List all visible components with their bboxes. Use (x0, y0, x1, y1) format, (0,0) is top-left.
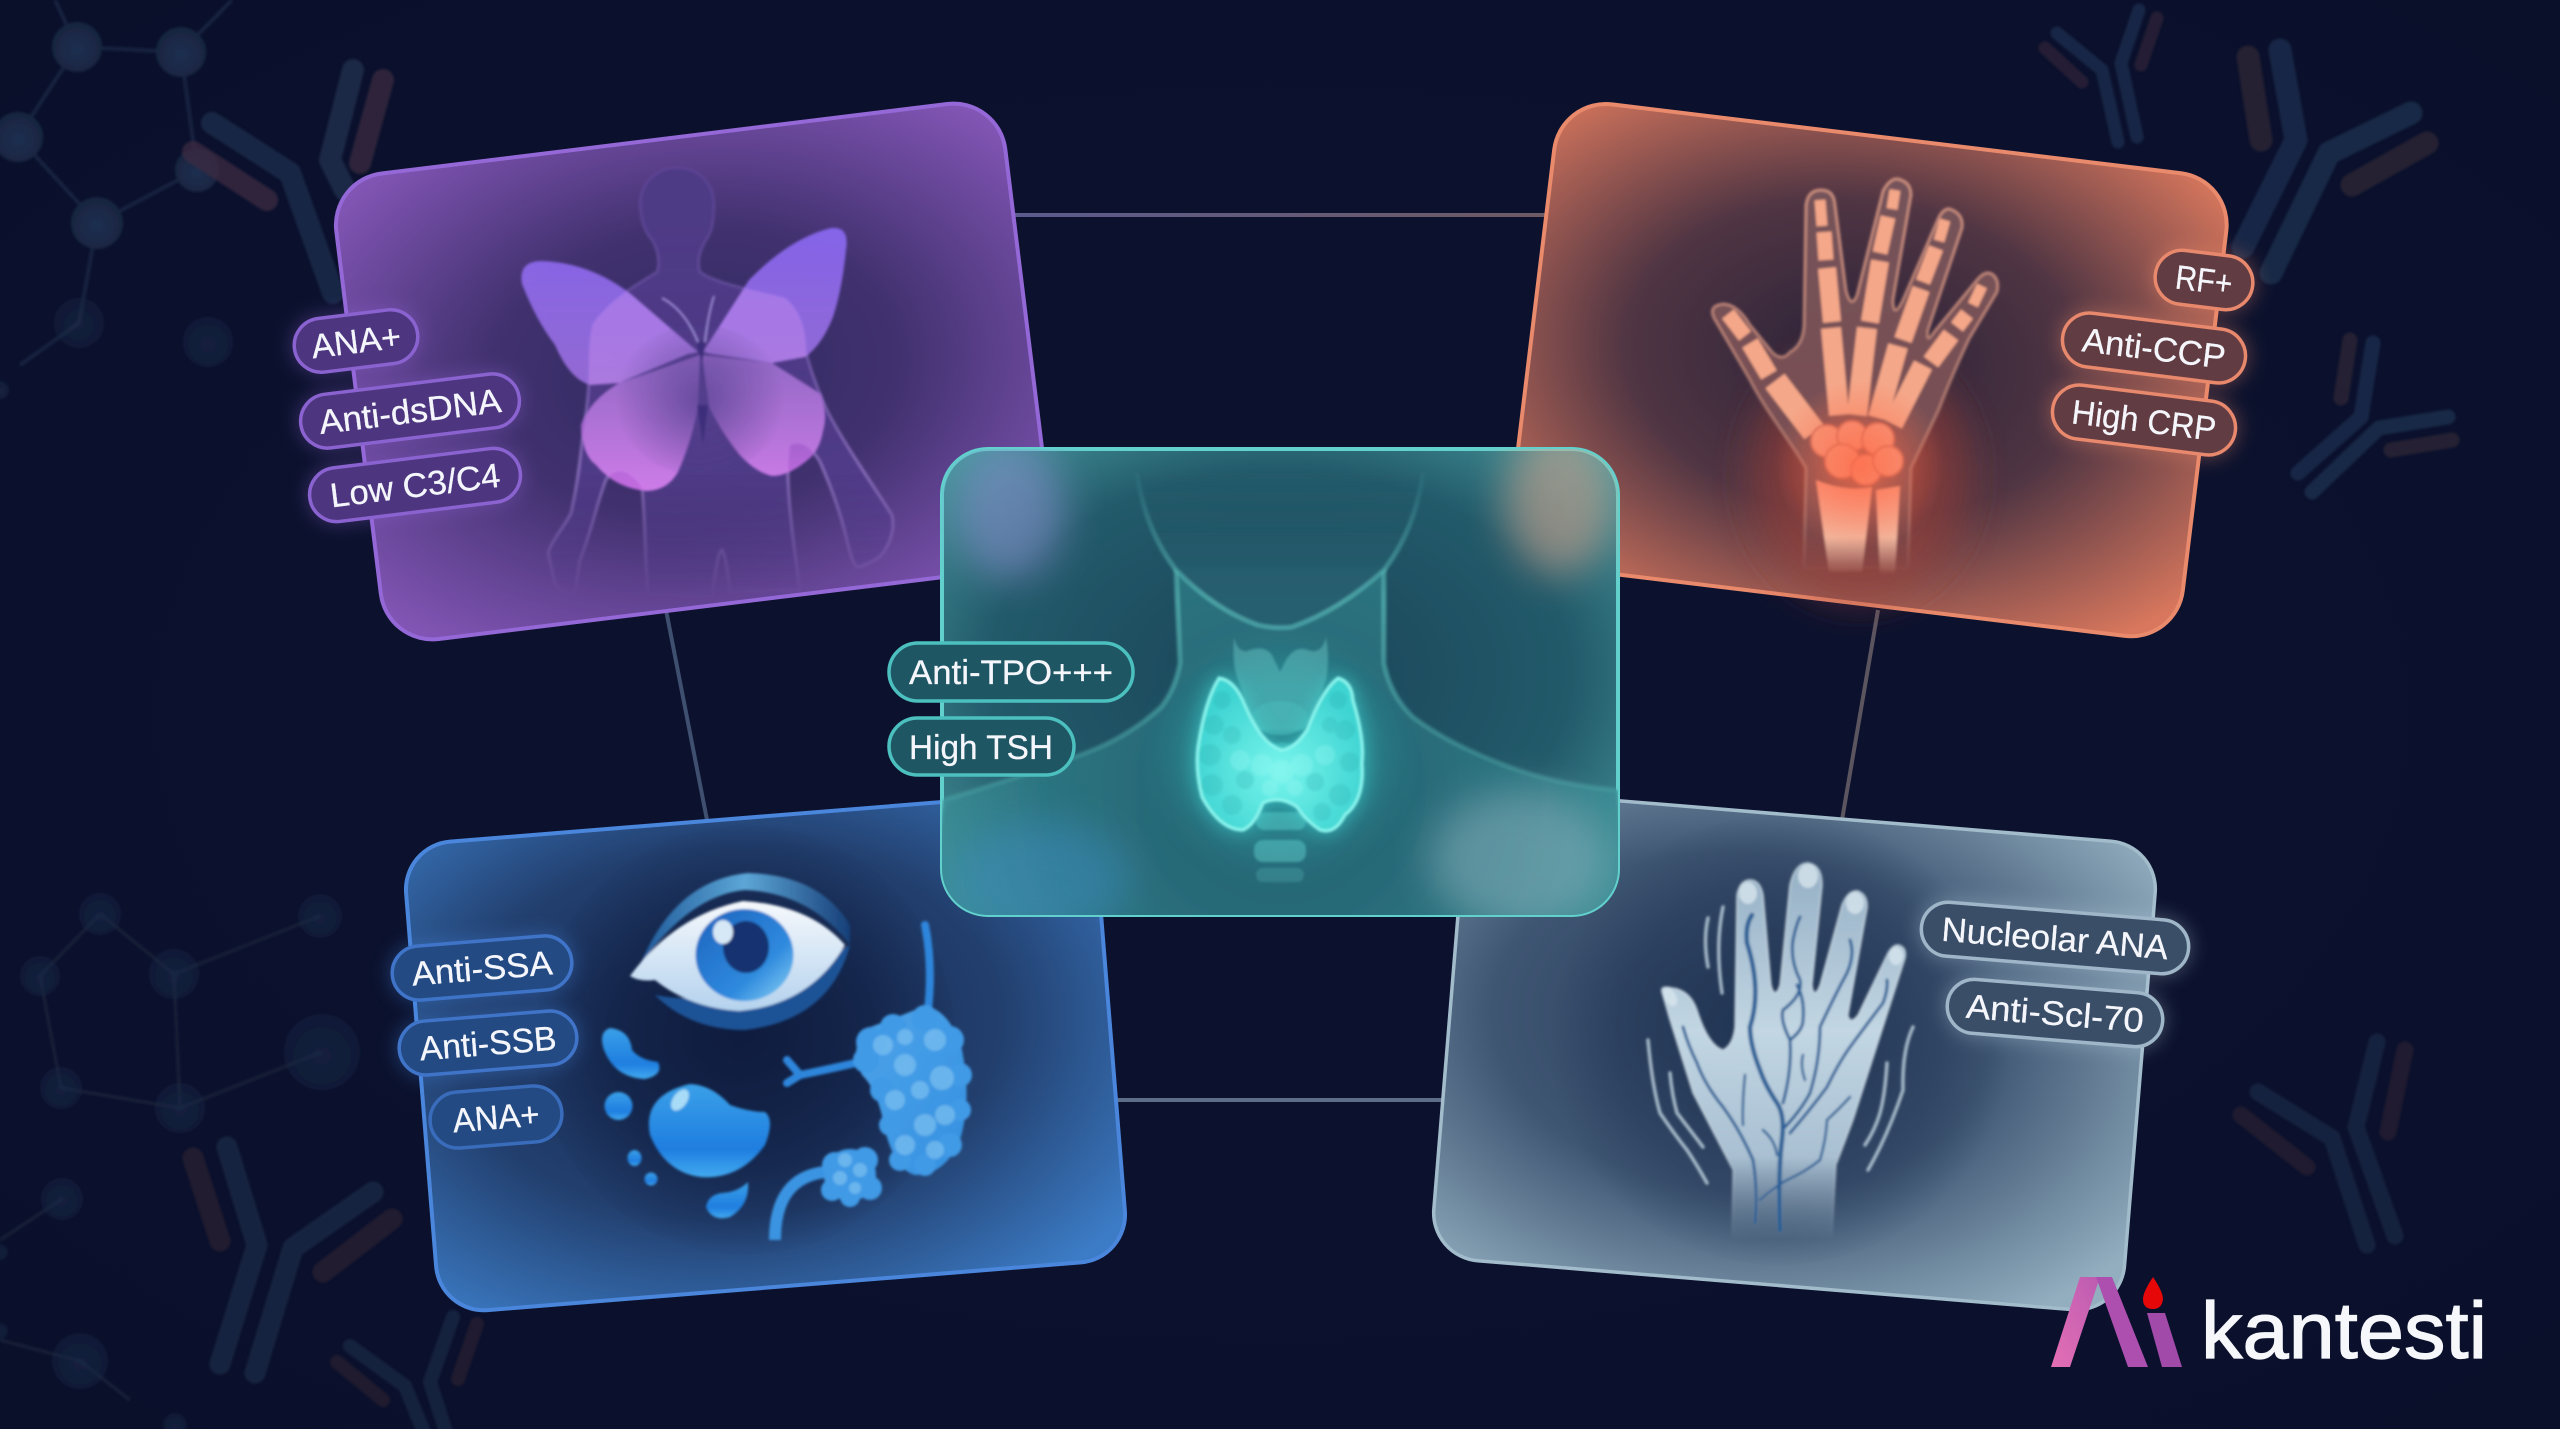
logo mark right leg (2096, 1277, 2148, 1367)
panel: Sjogren (blue) (388, 790, 1129, 1314)
upper right wing (703, 228, 847, 363)
main lobe (856, 1006, 967, 1175)
icon: thyroid gland (1197, 678, 1363, 831)
inflammation glow (1775, 380, 1945, 550)
pill: Low C3/C4 (304, 443, 526, 527)
finger bones (1728, 190, 1982, 432)
card: blue glass (402, 790, 1129, 1314)
icon: thyroid glow (1197, 678, 1363, 831)
card: orange glass (1504, 98, 2233, 642)
pill: Anti-Scl-70: Anti-Scl-70 (1965, 988, 2145, 1040)
thyroid highlights (1230, 745, 1335, 796)
pill: High TSH: High TSH (909, 729, 1053, 767)
pill: Anti-Scl-70 (1943, 974, 2167, 1052)
panel: scleroderma (gray-blue) (1430, 788, 2193, 1314)
antennae (662, 296, 714, 342)
card: gray glass (1430, 788, 2159, 1314)
butterfly body (697, 340, 708, 445)
fingertips (1660, 864, 1903, 1009)
crescent droplet (602, 1028, 659, 1079)
icon: human body silhouette (548, 168, 893, 596)
veins (1683, 915, 1887, 1230)
panel: rheumatoid arthritis (orange) (1504, 98, 2258, 642)
eyelid arc (640, 873, 850, 965)
background antibody upper left (193, 70, 383, 293)
pill: Anti-SSB (395, 1007, 581, 1079)
background molecules upper left (0, 0, 233, 399)
card: teal glass (942, 449, 1618, 915)
icon: neck and shoulders (930, 570, 1630, 930)
pill: Anti-SSA (388, 932, 576, 1004)
pill: Anti-CCP (2057, 307, 2251, 389)
corner colour bleed (950, 425, 1615, 940)
hand silhouette (1662, 863, 1905, 1237)
pill: Nucleolar ANA: Nucleolar ANA (1940, 911, 2170, 967)
pill: Low C3/C4: Low C3/C4 (328, 457, 502, 515)
pill: High CRP (2047, 379, 2241, 461)
pill: Anti-dsDNA (295, 369, 525, 453)
wing central shading (615, 325, 785, 475)
highlight (713, 920, 733, 944)
small lobe (821, 1147, 882, 1207)
dark halo behind illustration (535, 825, 955, 1255)
small drops (604, 1092, 748, 1218)
droplet highlight (667, 1086, 693, 1114)
pill: ANA+: ANA+ (309, 318, 403, 366)
thyroid body (1197, 678, 1363, 831)
icon: thyroid wide glow (1175, 655, 1385, 855)
card: purple glass (330, 98, 1056, 645)
pill: Anti-SSB: Anti-SSB (418, 1020, 558, 1068)
icon: hand with veins (1648, 863, 1913, 1237)
forearm bones (1816, 480, 1900, 574)
icon: jaw outline (1137, 473, 1423, 628)
icon: head and jaw (1137, 473, 1423, 628)
carpal bones (1811, 421, 1903, 485)
pill: RF+: RF+ (2173, 259, 2234, 303)
lower left wing (581, 355, 700, 491)
logo: kantesti (2051, 1277, 2487, 1375)
pill: RF+ (2150, 244, 2258, 316)
connector lines between panels (666, 215, 1878, 1100)
pill: High TSH (889, 718, 1074, 775)
panel: Hashimoto thyroid (teal, center) (889, 425, 1630, 940)
logo wordmark: kantesti (2201, 1286, 2487, 1375)
pill: Anti-TPO+++: Anti-TPO+++ (909, 654, 1113, 692)
background antibody right middle (2298, 340, 2452, 492)
pill: ANA+ (428, 1084, 564, 1150)
background antibody top right large (2243, 50, 2427, 273)
pill: Anti-CCP: Anti-CCP (2080, 321, 2228, 377)
background antibody lower right (2241, 1042, 2405, 1245)
logo blood drop (2143, 1277, 2163, 1309)
background antibody bottom (337, 1317, 477, 1429)
lobules (833, 1029, 955, 1194)
wrist glow (1750, 350, 1970, 600)
lobe bumps (853, 1005, 972, 1176)
icon: larynx (1234, 637, 1328, 730)
icon: salivary gland (775, 925, 972, 1240)
body overlap highlight (582, 288, 826, 491)
icon: trachea rings (1252, 701, 1308, 882)
logo mark left leg (2051, 1277, 2100, 1367)
lower right wing (702, 355, 825, 476)
dark halo behind hand (1550, 815, 2010, 1265)
iris (696, 909, 794, 1001)
icon: tear droplets (602, 1028, 770, 1218)
pill: ANA+: ANA+ (451, 1096, 541, 1140)
thyroid lobules (1199, 691, 1360, 821)
eye white (630, 901, 845, 1011)
lower duct (775, 1172, 825, 1240)
background antibody top right small (2045, 10, 2157, 142)
pill: ANA+ (289, 304, 423, 378)
pill: High CRP: High CRP (2070, 393, 2218, 449)
large droplet (649, 1084, 770, 1177)
logo mark i (2147, 1313, 2182, 1367)
pill: Nucleolar ANA (1917, 897, 2193, 979)
tremor lines (1648, 907, 1913, 1183)
background molecules lower left (0, 893, 360, 1429)
pupil (723, 921, 769, 973)
icon: butterfly rash (520, 226, 848, 493)
upper left wing (521, 261, 698, 385)
icon: eye (630, 873, 850, 1030)
lower lid (655, 945, 850, 1030)
pill: Anti-SSA: Anti-SSA (410, 944, 554, 994)
pill: Anti-dsDNA: Anti-dsDNA (317, 382, 504, 442)
icon: inflamed hand x-ray (1712, 179, 1998, 600)
pill: Anti-TPO+++ (889, 643, 1133, 701)
panel: lupus (purple) (289, 98, 1056, 645)
ducts (787, 925, 930, 1083)
hand outline (1712, 179, 1998, 568)
background antibody lower left (193, 1147, 392, 1373)
